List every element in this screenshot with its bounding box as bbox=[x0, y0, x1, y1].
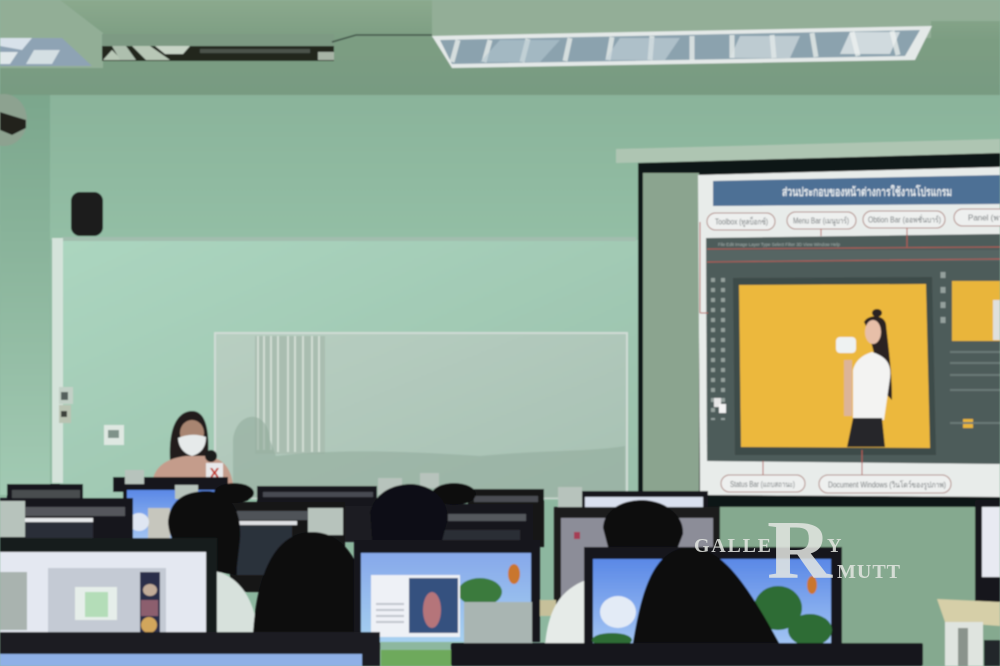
label: status bar: Status Bar (แถบสถานะ) bbox=[730, 480, 795, 489]
wallpaper emblem bbox=[508, 564, 520, 584]
ceiling cable bbox=[332, 35, 432, 42]
white shirt right bbox=[545, 580, 586, 645]
glass sign bbox=[464, 602, 532, 643]
monitor back 3 bbox=[123, 484, 229, 542]
desk bbox=[937, 599, 1000, 666]
teacher face bbox=[180, 420, 204, 446]
side strip bbox=[140, 572, 160, 633]
student: long hair centre bbox=[253, 532, 370, 634]
desktop window bbox=[0, 552, 206, 633]
menu bar: File Edit Image Layer Type Select Filter 3D View Window Help bbox=[718, 242, 840, 247]
colour swatches bbox=[714, 398, 726, 413]
label: status bar bbox=[721, 475, 805, 492]
keyboard shelf bbox=[540, 600, 556, 616]
monitor row 2 middle bbox=[345, 506, 375, 542]
photoshop window bbox=[700, 222, 1000, 475]
label: toolbox bbox=[707, 213, 775, 230]
monitor behind teacher bbox=[113, 477, 228, 492]
wall under the screen bbox=[700, 505, 1000, 666]
monitor row 2 centre bbox=[230, 502, 345, 592]
ceiling beam and light: left bbox=[0, 0, 103, 68]
shirt bbox=[212, 570, 258, 634]
projector screen housing bbox=[616, 139, 1000, 163]
back row monitors bbox=[0, 477, 1000, 666]
monitor left row 2 bbox=[0, 498, 133, 540]
right wallpaper bbox=[593, 559, 831, 646]
navigator thumbnail bbox=[952, 281, 1000, 341]
wallpaper tree bbox=[458, 578, 502, 606]
label: menu bar: Menu Bar (เมนูบาร์) bbox=[793, 216, 849, 226]
label: menu bar bbox=[787, 212, 856, 229]
document image bbox=[739, 284, 930, 448]
label: panel bbox=[954, 209, 1000, 226]
ceiling light: centre-left slit bbox=[102, 34, 334, 61]
unlit screen margin bbox=[643, 173, 699, 495]
layer thumbnail bbox=[963, 419, 973, 428]
upper wall bbox=[46, 95, 1000, 240]
watermark: MUTT bbox=[837, 561, 901, 583]
air conditioner bbox=[0, 94, 27, 146]
wallpaper emblem bbox=[807, 576, 817, 594]
student: right boy bbox=[603, 500, 683, 547]
slide bbox=[698, 167, 1000, 497]
front row monitor right bbox=[451, 643, 923, 666]
left side wall bbox=[0, 95, 50, 495]
centre monitor bbox=[354, 540, 540, 643]
document frame bbox=[733, 277, 936, 455]
right wallpaper monitor bbox=[584, 547, 842, 653]
microphone bbox=[205, 450, 217, 462]
panel icon strip bbox=[940, 272, 946, 330]
centre wallpaper bbox=[361, 553, 531, 642]
student: centre boy bbox=[370, 484, 447, 541]
wallpaper trees bbox=[592, 586, 832, 647]
screen frame bbox=[638, 153, 1000, 507]
conduit bbox=[52, 238, 63, 483]
top-right ceiling beam bbox=[931, 0, 1000, 21]
watermark: Y bbox=[827, 535, 842, 557]
slide title bbox=[713, 175, 1000, 206]
teacher body bbox=[152, 456, 233, 484]
student: long hair right bbox=[632, 547, 783, 650]
wall speaker bbox=[71, 192, 103, 236]
chart bbox=[75, 587, 117, 620]
monitor back 6 bbox=[468, 489, 544, 547]
ceiling bbox=[0, 0, 1000, 100]
watermark: GALLE bbox=[694, 535, 771, 557]
label: option bar bbox=[863, 211, 945, 228]
monitor row 2 right bbox=[440, 504, 533, 546]
students back row heads bbox=[214, 483, 476, 505]
red guide lines bbox=[700, 222, 1000, 475]
thermostat bbox=[104, 425, 124, 445]
monitor grey screen bbox=[554, 507, 720, 607]
projection screen bbox=[638, 153, 1000, 507]
label: document windows bbox=[819, 475, 951, 493]
acrylic signs bbox=[0, 470, 582, 537]
wallpaper clouds bbox=[600, 596, 636, 628]
side panel rows bbox=[950, 352, 1000, 423]
teacher bbox=[152, 411, 233, 484]
page panel bbox=[48, 568, 166, 633]
tool column bbox=[713, 278, 723, 420]
label: toolbox: Toolbox (ทูลบ็อกซ์) bbox=[715, 216, 768, 228]
wall rail bbox=[62, 237, 636, 241]
option bar bbox=[707, 250, 1000, 261]
watermark bbox=[694, 504, 901, 597]
blind reflection bbox=[255, 336, 325, 454]
monitor back 1 bbox=[7, 484, 83, 500]
student: boy with glasses bbox=[168, 491, 258, 634]
front left monitor bbox=[0, 538, 217, 634]
label: option bar: Obtion Bar (ออพชั่นบาร์) bbox=[868, 214, 941, 224]
teacher hair bbox=[170, 411, 208, 460]
electrical boxes bbox=[59, 387, 73, 423]
chart bars bbox=[85, 592, 108, 617]
microphone cube: X bbox=[209, 465, 220, 482]
thumbnail figure bbox=[993, 300, 1000, 340]
far right monitor bbox=[975, 500, 1000, 615]
teacher face mask bbox=[178, 435, 206, 456]
monitor back 5 bbox=[257, 486, 377, 508]
ceiling beam and light: centre bbox=[432, 0, 932, 68]
lower wall bbox=[60, 240, 650, 500]
reflection of the room bbox=[233, 417, 625, 498]
label: document windows: Document Windows (วินโดว์ของรูปภาพ) bbox=[828, 480, 946, 490]
head bbox=[168, 491, 240, 575]
acrylic sign bbox=[0, 572, 27, 630]
whiteboard bbox=[215, 333, 627, 498]
splash card bbox=[371, 575, 460, 637]
model bbox=[836, 309, 892, 447]
monitor right back bbox=[582, 491, 708, 510]
watermark: R bbox=[767, 504, 833, 597]
lawn under the centre monitor bbox=[381, 650, 451, 666]
front row monitor left bbox=[0, 632, 380, 666]
